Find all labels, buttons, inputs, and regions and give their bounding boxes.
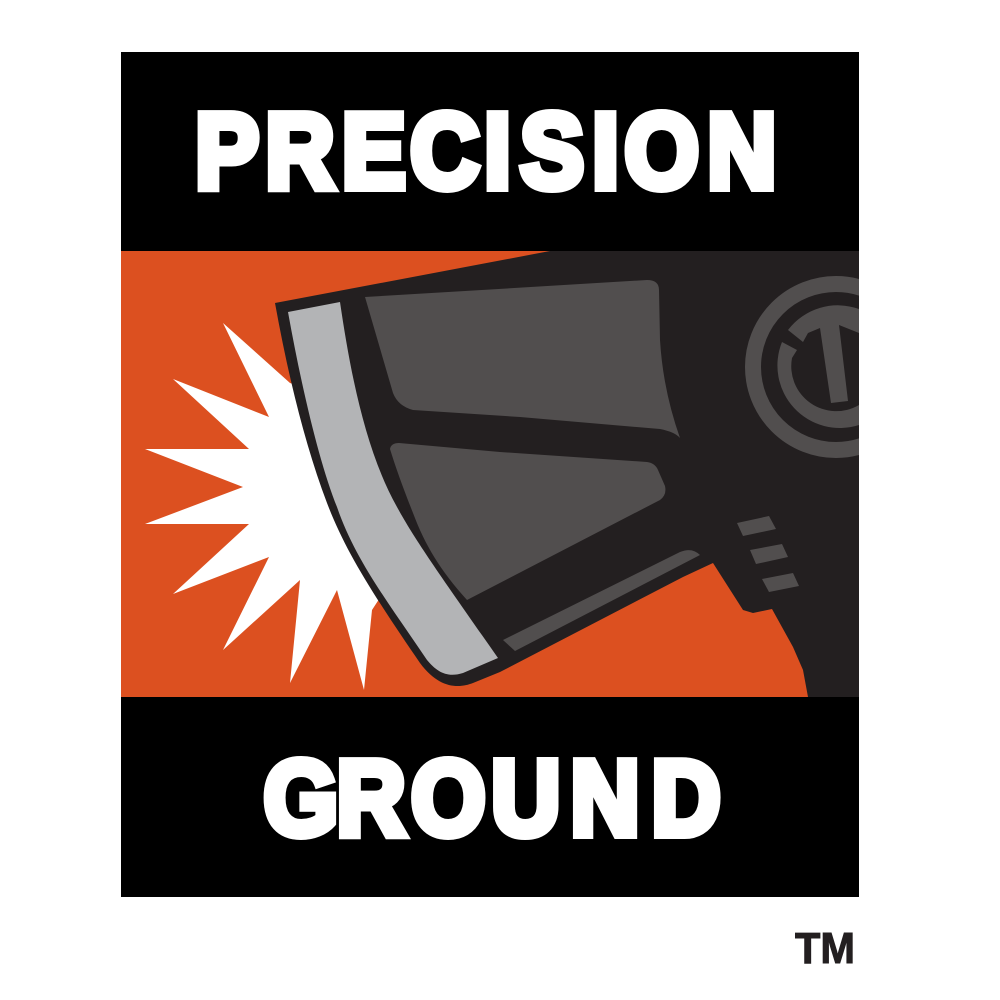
axe lower strip [503,550,700,651]
logo lower arc [777,342,859,428]
grip ticks [737,516,799,592]
logo outer ring [745,276,859,458]
lower axe panel [390,443,665,600]
upper axe panel [365,280,680,438]
badge [121,52,859,964]
bottom black band [121,697,859,897]
heading: PRECISION: PRECISION [195,93,776,211]
logo top arc and T [788,305,859,403]
heading: GROUND: GROUND [264,740,720,858]
trademark: TM [795,924,855,973]
icon: spark burst [145,323,400,690]
icon: axe head [275,251,919,697]
axe body [275,251,859,697]
icon: circular logo [745,276,859,458]
axe blade edge [288,302,498,675]
top black band [121,52,859,252]
orange panel [121,251,859,697]
